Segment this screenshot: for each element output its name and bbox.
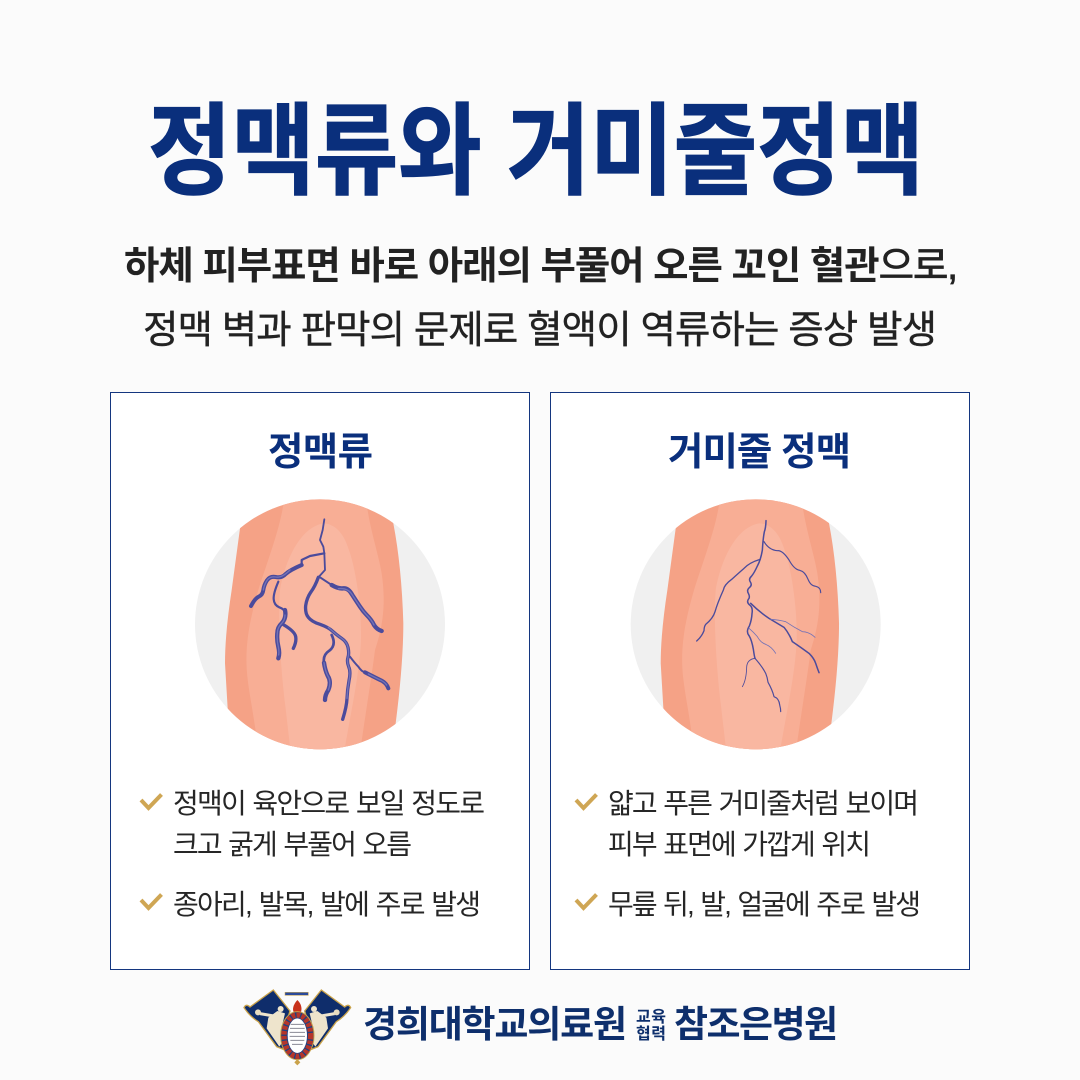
subtitle text block	[124, 245, 958, 352]
panel: varicose veins	[110, 392, 530, 970]
panel: spider veins	[550, 392, 970, 970]
bullet text: 정맥이 육안으로 보일 정도로	[173, 788, 485, 819]
panel heading: spider veins: 거미줄 정맥	[668, 431, 851, 474]
logo emblem	[244, 990, 351, 1065]
bullet text continued: 피부 표면에 가깝게 위치	[608, 829, 871, 860]
title: 정맥류와 거미줄정맥	[148, 96, 924, 208]
hospital name: 교육	[636, 1008, 666, 1026]
bullet text continued: 크고 굵게 부풀어 오름	[173, 829, 412, 860]
bullet text: 종아리, 발목, 발에 주로 발생	[173, 889, 481, 920]
bullet text: 무릎 뒤, 발, 얼굴에 주로 발생	[608, 889, 921, 920]
panel heading: varicose veins: 정맥류	[268, 431, 373, 474]
subtitle text block: 하체 피부표면 바로 아래의 부풀어 오른 꼬인 혈관으로,	[124, 245, 958, 288]
illustration: thin spider veins on leg	[631, 490, 881, 757]
hospital name: 협력	[636, 1025, 666, 1043]
icon: check	[141, 794, 162, 808]
icon: check	[576, 794, 596, 808]
icon: check	[576, 894, 596, 908]
icon: check	[141, 894, 162, 908]
bullet text: 얇고 푸른 거미줄처럼 보이며	[608, 788, 919, 819]
hospital name: 경희대학교의료원	[363, 1004, 627, 1045]
illustration: thick varicose veins on leg	[195, 490, 445, 757]
hospital name	[363, 1004, 838, 1045]
hospital name: 참조은병원	[674, 1004, 838, 1045]
subtitle text block: 정맥 벽과 판막의 문제로 혈액이 역류하는 증상 발생	[143, 309, 937, 352]
